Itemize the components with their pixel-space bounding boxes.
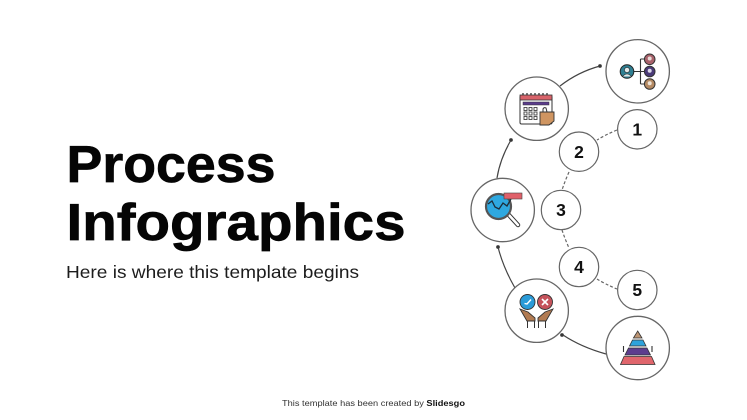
number badge 2: 2 (574, 142, 584, 162)
panel: people hierarchy icon (606, 40, 669, 103)
subtitle: Here is where this template begins (66, 262, 359, 282)
number badge 3: 3 (556, 200, 566, 220)
arrow: calendar to people (560, 65, 601, 86)
number badge 5 (618, 270, 657, 310)
panel: calendar icon (505, 77, 568, 140)
number badge 4: 4 (574, 257, 584, 277)
panel: pyramid icon (606, 316, 669, 380)
dashed connector: 1 to 2 (597, 130, 617, 140)
footer credit: This template has been created by Slidesgo (282, 398, 465, 408)
number badge 1: 1 (632, 120, 642, 140)
number badge 5: 5 (632, 280, 642, 300)
title: Infographics (66, 194, 406, 252)
dashed connector: 2 to 3 (562, 172, 569, 190)
dashed connector: 3 to 4 (562, 230, 569, 248)
title: Process (66, 136, 276, 194)
number badge 4 (559, 247, 599, 287)
number badge 1 (618, 110, 657, 149)
arrow: hands to magnifier (497, 246, 515, 288)
panel: hands with check and cross icon (505, 279, 568, 342)
number badge 2 (559, 132, 599, 171)
number badge 3 (541, 190, 581, 230)
panel: magnifier icon (471, 178, 534, 242)
title (66, 136, 406, 252)
arrow: magnifier to calendar (497, 139, 512, 178)
arrow: pyramid to hands (561, 334, 606, 354)
dashed connector: 4 to 5 (597, 279, 617, 289)
